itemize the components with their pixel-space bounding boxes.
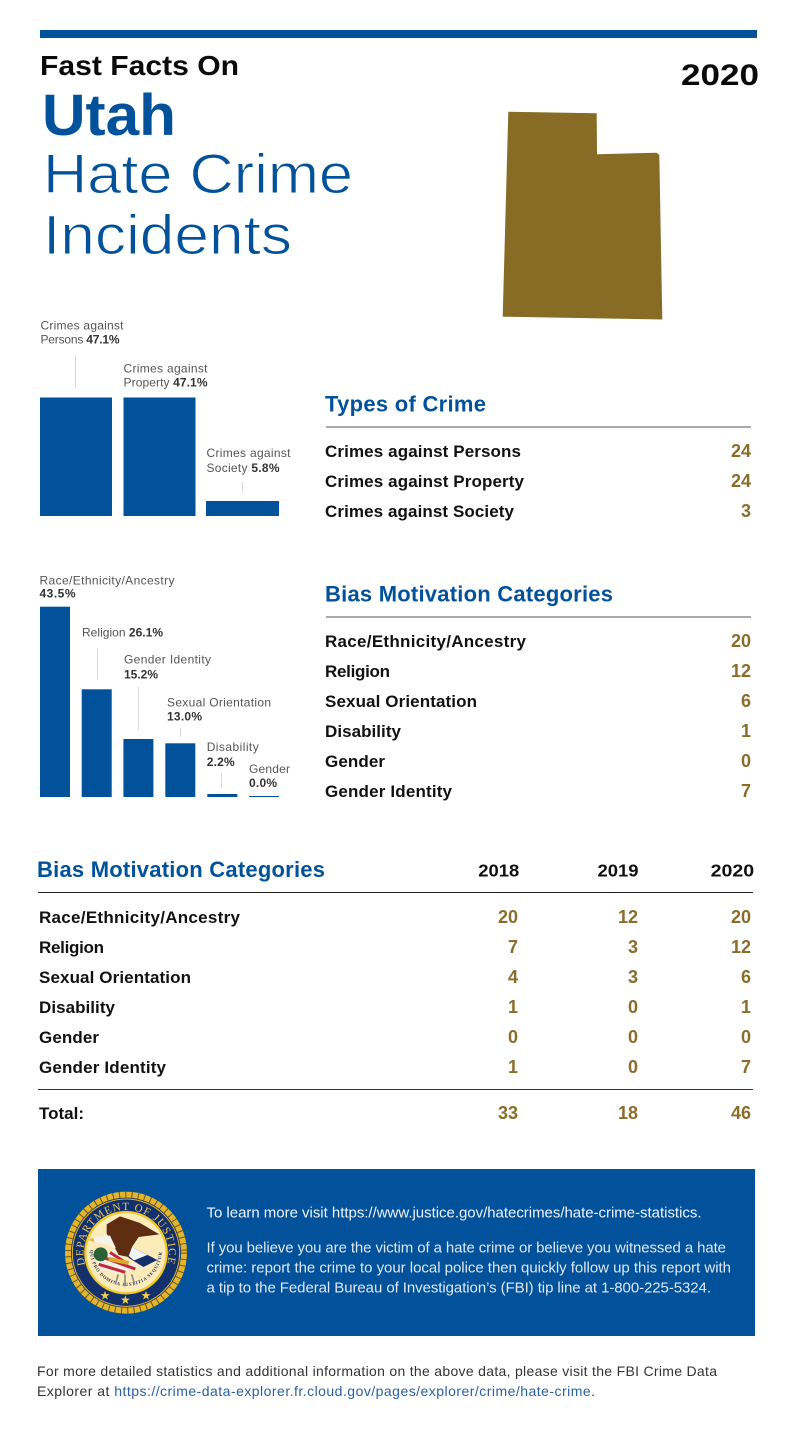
row: gender: 0 bbox=[628, 1027, 638, 1047]
row: sexual orientation: Sexual Orientation bbox=[325, 692, 477, 711]
row: sexual orientation bbox=[39, 967, 751, 987]
label: society: Society 5.8% bbox=[206, 461, 280, 475]
text: report guidance bbox=[206, 1239, 731, 1296]
label: race bbox=[40, 574, 174, 600]
row: sexual orientation bbox=[325, 691, 751, 711]
row: sexual orientation: Sexual Orientation bbox=[39, 968, 191, 987]
label: society: Crimes against bbox=[206, 446, 291, 460]
title: Utah bbox=[42, 83, 176, 148]
row: society: Crimes against Society bbox=[325, 502, 515, 521]
label: disability bbox=[207, 740, 259, 769]
label: gender: 0.0% bbox=[249, 776, 277, 790]
year headers: 2019 bbox=[598, 860, 639, 880]
row: gender identity bbox=[39, 1057, 751, 1077]
table: bias motivation by year bbox=[37, 857, 754, 1123]
row: gender: Gender bbox=[39, 1028, 99, 1047]
row: total: Total: bbox=[39, 1104, 84, 1123]
row: disability: 1 bbox=[741, 997, 751, 1017]
label: gender: Gender bbox=[249, 762, 290, 776]
label: gender identity bbox=[124, 653, 211, 681]
row: gender: Gender bbox=[325, 752, 385, 771]
table heading: Bias Motivation Categories bbox=[37, 857, 325, 882]
panel: contact information bbox=[38, 1169, 755, 1336]
row: religion: 7 bbox=[508, 937, 518, 957]
label: persons: Crimes against bbox=[40, 318, 124, 332]
label: property: Property 47.1% bbox=[124, 376, 208, 390]
row: gender: 0 bbox=[741, 751, 751, 771]
title bbox=[40, 50, 353, 266]
row: disability bbox=[39, 997, 751, 1017]
label: society bbox=[206, 446, 291, 475]
heading: Types of Crime bbox=[325, 392, 486, 416]
label: persons: Persons 47.1% bbox=[40, 332, 120, 346]
bar: crimes against persons bbox=[40, 398, 112, 516]
label: disability: 2.2% bbox=[207, 755, 235, 769]
row: property: Crimes against Property bbox=[325, 472, 525, 491]
label: property bbox=[124, 362, 208, 390]
row: disability: 1 bbox=[508, 997, 518, 1017]
row: race: Race/Ethnicity/Ancestry bbox=[325, 632, 527, 651]
row: gender: 0 bbox=[508, 1027, 518, 1047]
label: persons bbox=[40, 318, 124, 346]
text: report guidance: a tip to the Federal Bureau of Investigation’s (FBI) tip line at 1-800-225-5324. bbox=[206, 1279, 711, 1296]
bar: disability bbox=[207, 794, 237, 797]
stars: ★ bbox=[141, 1289, 151, 1303]
label: gender identity: 15.2% bbox=[124, 667, 158, 681]
bar: gender identity bbox=[123, 739, 153, 797]
row: gender identity: 7 bbox=[741, 1057, 751, 1077]
label: sexual orientation bbox=[167, 696, 271, 724]
row: persons bbox=[325, 441, 751, 461]
year headers: 2018 bbox=[478, 860, 520, 880]
label: property: Crimes against bbox=[124, 362, 208, 376]
row: persons: Crimes against Persons bbox=[325, 442, 521, 461]
row: property: 24 bbox=[731, 471, 751, 491]
footer note bbox=[37, 1363, 717, 1399]
top accent bar bbox=[40, 30, 757, 38]
text: learn more: To learn more visit https://www.justice.gov/hatecrimes/hate-crime-statistics. bbox=[206, 1205, 702, 1222]
label: sexual orientation: Sexual Orientation bbox=[167, 696, 271, 710]
text: report guidance: crime: report the crime to your local police then quickly follow up this report with bbox=[206, 1259, 731, 1276]
stars: ★ bbox=[100, 1289, 110, 1303]
row: gender bbox=[39, 1027, 751, 1047]
row: race: Race/Ethnicity/Ancestry bbox=[39, 908, 241, 927]
row: total: 46 bbox=[731, 1103, 751, 1123]
icon: Department of Justice seal bbox=[65, 1192, 187, 1314]
label: gender identity: Gender Identity bbox=[124, 653, 211, 667]
row: religion: 3 bbox=[628, 937, 638, 957]
row: property bbox=[325, 471, 751, 491]
row: gender identity: Gender Identity bbox=[39, 1058, 167, 1077]
row: sexual orientation: 6 bbox=[741, 691, 751, 711]
bar: religion bbox=[82, 689, 112, 797]
row: society bbox=[325, 501, 751, 521]
row: total: 18 bbox=[618, 1103, 638, 1123]
row: total bbox=[39, 1103, 751, 1123]
bar: race bbox=[40, 607, 70, 797]
row: gender identity: 1 bbox=[508, 1057, 518, 1077]
row: race: 12 bbox=[618, 907, 638, 927]
stars: ★ bbox=[120, 1293, 131, 1307]
footer note: For more detailed statistics and additional information on the above data, please visit the FBI Crime Data bbox=[37, 1363, 717, 1379]
panel: bias motivation categories bbox=[325, 582, 751, 801]
title: Fast Facts On bbox=[40, 50, 239, 81]
row: persons: 24 bbox=[731, 441, 751, 461]
row: religion bbox=[39, 937, 751, 957]
icon: Department of Justice seal: DEPARTMENT OF JUSTICE bbox=[76, 1202, 176, 1266]
icon: Department of Justice seal: QUI PRO DOMINA JUSTITIA SEQUITUR bbox=[89, 1250, 162, 1286]
row: race: 20 bbox=[731, 907, 751, 927]
title: Hate Crime bbox=[43, 142, 353, 205]
year headers bbox=[478, 860, 754, 880]
row: sexual orientation: 6 bbox=[741, 967, 751, 987]
eagle and shield artwork bbox=[88, 1216, 159, 1286]
row: sexual orientation: 4 bbox=[508, 967, 518, 987]
row: race bbox=[39, 907, 751, 927]
bar: sexual orientation bbox=[165, 743, 195, 797]
row: religion: 12 bbox=[731, 661, 751, 681]
row: society: 3 bbox=[741, 501, 751, 521]
panel: types of crime bbox=[325, 392, 751, 521]
row: gender identity bbox=[325, 781, 751, 801]
row: race: 20 bbox=[498, 907, 518, 927]
text: report guidance: If you believe you are the victim of a hate crime or believe you witnessed a hate bbox=[206, 1239, 726, 1256]
row: disability bbox=[325, 721, 751, 741]
row: religion: 12 bbox=[731, 937, 751, 957]
label: disability: Disability bbox=[207, 740, 259, 754]
label: gender bbox=[249, 762, 290, 790]
row: gender identity: 0 bbox=[628, 1057, 638, 1077]
row: race bbox=[325, 631, 751, 651]
row: gender identity: 7 bbox=[741, 781, 751, 801]
label: religion: Religion 26.1% bbox=[82, 626, 163, 640]
bar chart: types of crime bbox=[40, 318, 291, 516]
stars bbox=[100, 1289, 151, 1307]
row: gender: 0 bbox=[741, 1027, 751, 1047]
bar: gender bbox=[249, 796, 279, 797]
map: Utah state shape bbox=[503, 112, 662, 320]
row: religion: Religion bbox=[39, 938, 104, 957]
row: disability: 0 bbox=[628, 997, 638, 1017]
row: religion: Religion bbox=[325, 662, 390, 681]
bar chart: bias motivation bbox=[40, 574, 290, 797]
footer note: Explorer at https://crime-data-explorer.fr.cloud.gov/pages/explorer/crime/hate-crime. bbox=[37, 1383, 595, 1399]
bar: crimes against society bbox=[206, 501, 279, 516]
label: race: 43.5% bbox=[40, 586, 76, 600]
row: gender bbox=[325, 751, 751, 771]
bar: crimes against property bbox=[124, 398, 196, 516]
row: religion bbox=[325, 661, 751, 681]
row: total: 33 bbox=[498, 1103, 518, 1123]
label: race: Race/Ethnicity/Ancestry bbox=[40, 574, 174, 588]
heading: Bias Motivation Categories bbox=[325, 582, 613, 606]
row: disability: Disability bbox=[39, 998, 116, 1017]
row: disability: 1 bbox=[741, 721, 751, 741]
row: disability: Disability bbox=[325, 722, 402, 741]
row: gender identity: Gender Identity bbox=[325, 782, 453, 801]
row: race: 20 bbox=[731, 631, 751, 651]
row: sexual orientation: 3 bbox=[628, 967, 638, 987]
year headers: 2020 bbox=[711, 860, 754, 880]
year: 2020 bbox=[681, 59, 759, 92]
title: Incidents bbox=[43, 203, 292, 266]
label: sexual orientation: 13.0% bbox=[167, 710, 202, 724]
